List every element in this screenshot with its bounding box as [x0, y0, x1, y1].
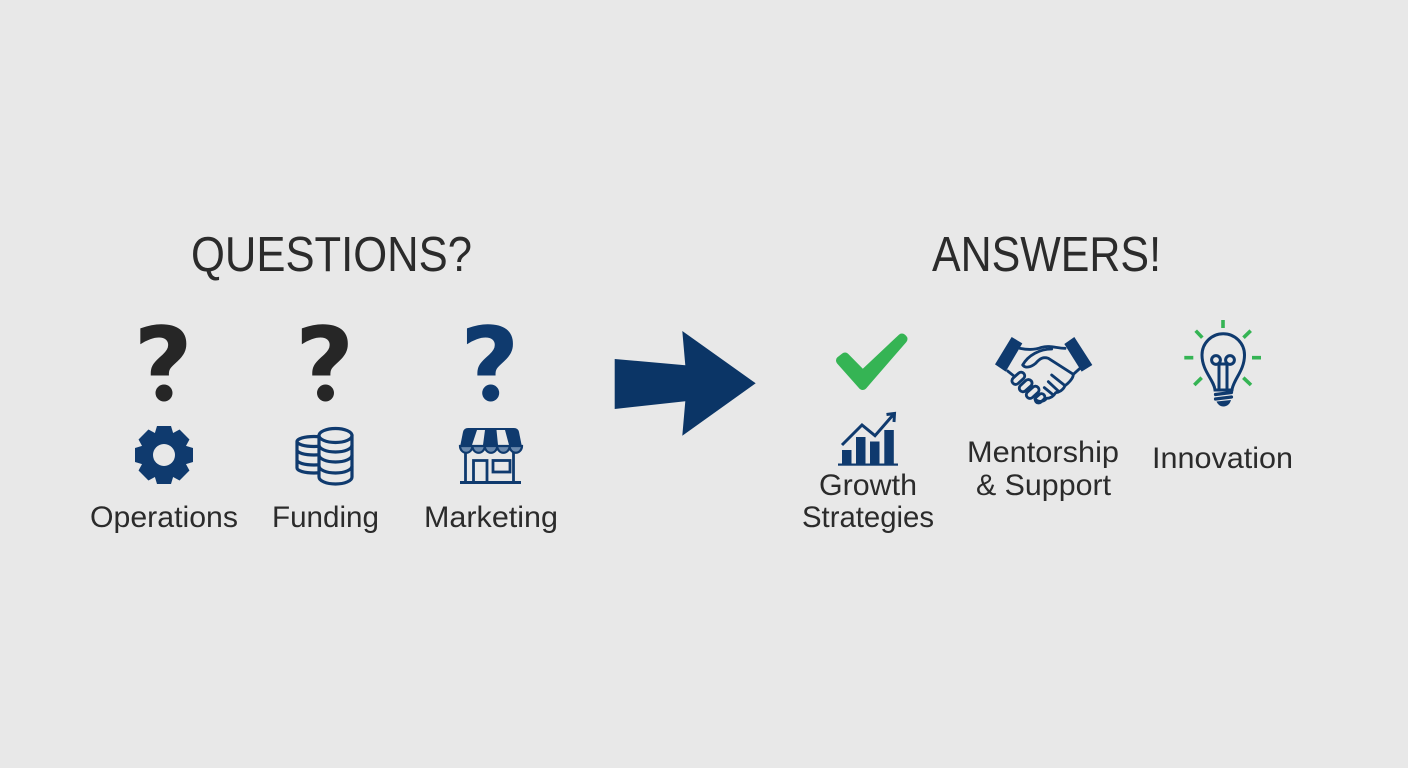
heading: answers: ANSWERS! — [932, 228, 1161, 282]
label: growth: Growth — [819, 469, 917, 502]
icon: gear — [135, 426, 193, 484]
icon: green check mark — [840, 338, 903, 386]
icon: coin stacks — [297, 428, 352, 484]
icon: question mark funding: ? — [295, 306, 354, 426]
label: funding: Funding — [272, 501, 379, 534]
icon: question mark operations: ? — [133, 306, 193, 426]
column: innovation — [1152, 320, 1293, 475]
column: mentorship and support — [967, 337, 1119, 502]
icon: growth chart — [838, 414, 898, 466]
arrow — [615, 331, 756, 436]
label: operations: Operations — [90, 501, 238, 534]
column: operations — [90, 306, 238, 534]
label: strategies: Strategies — [802, 501, 934, 534]
label: innovation: Innovation — [1152, 442, 1293, 475]
label: mentorship: Mentorship — [967, 436, 1119, 469]
column: marketing — [426, 324, 556, 533]
icon: handshake — [995, 337, 1092, 404]
column: funding — [274, 324, 378, 533]
icon: question mark operations — [140, 324, 186, 402]
icon: question mark marketing — [466, 324, 513, 402]
label: marketing: Marketing — [424, 501, 558, 534]
column: growth strategies — [802, 338, 934, 534]
heading: questions: QUESTIONS? — [191, 228, 472, 282]
label: and support: & Support — [976, 469, 1112, 502]
icon: question mark marketing: ? — [460, 306, 520, 426]
icon: question mark funding — [302, 324, 348, 402]
icon: light bulb — [1184, 320, 1261, 406]
icon: storefront — [460, 428, 522, 484]
